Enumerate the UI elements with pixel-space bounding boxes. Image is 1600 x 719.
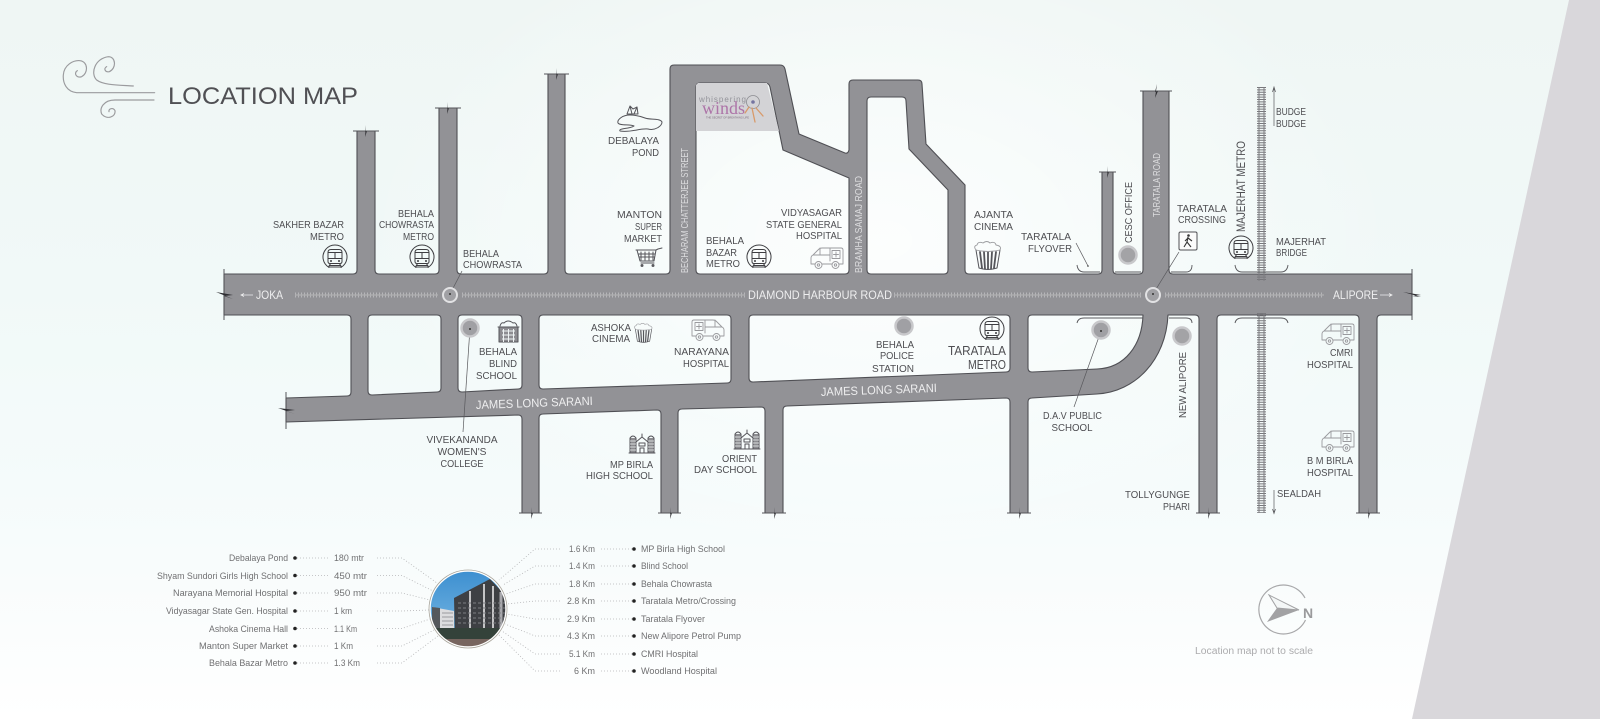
icon: pond [618,106,662,131]
poi: majerhat metro [1229,141,1253,258]
road label: becharam chatterjee street: BECHARAM CHATTERJEE STREET [680,148,691,273]
poi: narayana hospital: NARAYANA [674,347,729,358]
row: shyam sundori school [157,571,367,582]
poi: behala chowrasta: BEHALA [463,249,499,260]
poi: vidyasagar state general hospital [766,208,843,268]
row: cmri hospital: CMRI Hospital [641,649,698,660]
poi: narayana hospital: HOSPITAL [683,359,729,370]
diamond harbour road centre line [295,292,1324,298]
poi: mp birla high school [586,434,655,482]
row: blind school [569,561,688,572]
poi: cesc office [1120,182,1136,264]
row: narayana hospital: 950 mtr [334,588,367,599]
label: debalaya pond: DEBALAYA [608,136,659,147]
label: majerhat bridge: BRIDGE [1276,248,1307,259]
row: taratala metro: 2.8 Km [567,596,595,607]
label: budge budge [1272,87,1306,130]
row: new alipore pump: 4.3 Km [567,631,595,642]
poi: behala police station: BEHALA [876,340,914,351]
road label: taratala road: TARATALA ROAD [1152,153,1163,217]
poi: majerhat metro: MAJERHAT METRO [1234,141,1248,232]
road label: diamond harbour road: DIAMOND HARBOUR ROAD [748,290,892,302]
poi: mp birla high school: MP BIRLA [610,460,653,471]
distance list: left [157,553,367,669]
row: behala bazar metro [209,658,360,669]
label: debalaya pond: POND [632,148,659,159]
icon: wind swirls [63,57,155,117]
poi: b m birla hospital: B M BIRLA [1307,456,1353,467]
poi: vivekananda womens college: COLLEGE [440,459,484,470]
poi: manton super market: MARKET [624,234,662,245]
poi: behala chowrasta metro: BEHALA [398,209,434,220]
road label: joka [241,290,283,302]
poi: debalaya pond [608,106,662,159]
grey corner panel [1412,0,1600,719]
project logo: whispering winds: winds [702,98,745,118]
poi: cmri hospital: CMRI [1330,348,1353,359]
row: taratala metro [567,596,736,607]
label: sealdah [1272,489,1321,514]
row: debalaya pond: 180 mtr [334,553,364,564]
poi: dav public school: D.A.V PUBLIC [1043,411,1102,422]
poi: vivekananda womens college [426,320,498,470]
compass: N [1303,605,1313,621]
poi: vidyasagar state general hospital: VIDYASAGAR [781,208,842,219]
row: cmri hospital: 5.1 Km [569,649,595,660]
row: vidyasagar hospital: 1 km [334,606,352,617]
poi: behala bazar metro: BAZAR [706,248,737,259]
poi: narayana hospital [674,320,729,370]
poi: new alipore: NEW ALIPORE [1177,352,1189,418]
road labels [241,148,1392,412]
row: woodland hospital [574,666,717,677]
poi: orient day school: DAY SCHOOL [694,465,757,476]
poi: cesc office: CESC OFFICE [1123,182,1135,243]
poi: taratala flyover: TARATALA [1021,232,1071,243]
project logo: whispering winds: whispering [698,95,746,104]
poi: behala blind school: BLIND [489,359,517,370]
distance list: right [567,544,741,677]
poi: ajanta cinema: AJANTA [974,210,1013,221]
road label: alipore: ALIPORE [1333,290,1378,302]
connector lines to photo [377,549,560,671]
flyover and bridge brackets [1077,265,1288,323]
title block [63,57,358,117]
poi: tollygunge phari [1125,490,1190,513]
poi: sakher bazar metro [273,220,347,267]
poi: manton super market: MANTON [617,210,662,221]
poi: ajanta cinema: CINEMA [974,222,1013,233]
poi: orient day school [694,430,760,476]
poi: mp birla high school: HIGH SCHOOL [586,471,653,482]
poi: vidyasagar state general hospital: STATE GENERAL [766,220,842,231]
poi: taratala metro: METRO [968,358,1006,372]
row: manton market [199,641,353,652]
poi: new alipore [1174,328,1190,418]
poi: vidyasagar state general hospital: HOSPITAL [796,231,842,242]
row: mp birla: 1.6 Km [569,544,595,555]
poi: behala blind school: SCHOOL [476,371,517,382]
poi: sakher bazar metro: SAKHER BAZAR [273,220,344,231]
row: behala chowrasta: Behala Chowrasta [641,579,713,590]
row: vidyasagar hospital: Vidyasagar State Gen. Hospital [166,606,288,617]
poi: ashoka cinema: ASHOKA [591,323,631,334]
row: cmri hospital [569,649,698,660]
row: new alipore pump [567,631,741,642]
row: woodland hospital: 6 Km [574,666,595,677]
label: sealdah: SEALDAH [1277,489,1321,500]
poi: behala chowrasta metro: CHOWRASTA [379,220,434,231]
row: new alipore pump: New Alipore Petrol Pump [641,631,741,642]
poi: taratala crossing: CROSSING [1178,215,1226,226]
row: behala chowrasta: 1.8 Km [569,579,595,590]
row: debalaya pond [229,553,364,564]
poi: behala blind school [476,321,519,382]
road end break marks [216,68,1421,519]
poi: behala chowrasta metro [379,209,434,267]
row: debalaya pond: Debalaya Pond [229,553,288,564]
poi: behala blind school: BEHALA [479,347,517,358]
poi: manton super market [617,210,662,267]
poi: orient day school: ORIENT [722,454,757,465]
poi: dav public school: SCHOOL [1052,423,1093,434]
row: shyam sundori school: Shyam Sundori Girls High School [157,571,288,582]
poi: behala chowrasta [443,249,522,302]
row: manton market: 1 Km [334,641,353,652]
road label: joka: JOKA [256,290,283,302]
poi: behala chowrasta metro: METRO [403,232,434,243]
row: mp birla: MP Birla High School [641,544,725,555]
poi: taratala crossing [1146,204,1227,302]
poi: taratala flyover: FLYOVER [1028,244,1072,255]
row: narayana hospital: Narayana Memorial Hospital [173,588,288,599]
label: majerhat bridge [1276,237,1326,259]
poi: manton super market: SUPER [635,222,662,233]
note: not to scale: Location map not to scale [1195,646,1313,657]
project logo: whispering winds: THE SECRET OF BREATHING LIFE [706,116,749,120]
poi: ashoka cinema [591,323,652,345]
row: behala bazar metro: 1.3 Km [334,658,360,669]
poi: ajanta cinema [974,210,1013,270]
row: taratala flyover: 2.9 Km [567,614,595,625]
poi: behala police station: STATION [872,364,914,375]
poi: behala police station [872,318,914,375]
label: budge budge: BUDGE [1276,119,1306,130]
poi: behala police station: POLICE [880,351,914,362]
row: woodland hospital: Woodland Hospital [641,666,717,677]
row: blind school: Blind School [641,561,688,572]
compass [1259,585,1313,634]
poi: ashoka cinema: CINEMA [592,334,630,345]
poi: behala chowrasta: CHOWRASTA [463,260,522,271]
row: blind school: 1.4 Km [569,561,595,572]
label: debalaya pond [608,136,659,159]
road network [224,65,1412,513]
poi: b m birla hospital [1307,431,1354,479]
row: shyam sundori school: 450 mtr [334,571,367,582]
row: taratala flyover: Taratala Flyover [641,614,705,625]
poi: tollygunge phari: TOLLYGUNGE [1125,490,1190,501]
row: ashoka cinema [209,624,357,635]
poi: b m birla hospital: HOSPITAL [1307,468,1353,479]
row: behala chowrasta [569,579,713,590]
row: ashoka cinema: Ashoka Cinema Hall [209,624,288,635]
row: behala bazar metro: Behala Bazar Metro [209,658,288,669]
poi: cmri hospital [1307,324,1354,371]
poi: vivekananda womens college: WOMEN'S [438,447,487,458]
row: mp birla [569,544,725,555]
row: ashoka cinema: 1.1 Km [334,624,357,635]
poi: taratala metro [948,317,1007,372]
label: budge budge: BUDGE [1276,107,1306,118]
railway line [1259,87,1264,513]
heading: location map: LOCATION MAP [168,83,358,110]
road label: bramha samaj road: BRAMHA SAMAJ ROAD [854,176,865,273]
road label: james long sarani west: JAMES LONG SARANI [476,394,593,412]
label: majerhat bridge: MAJERHAT [1276,237,1326,248]
road label: james long sarani east: JAMES LONG SARANI [821,381,937,399]
row: manton market: Manton Super Market [199,641,288,652]
row: taratala flyover [567,614,705,625]
poi: taratala flyover [1021,232,1089,267]
poi: behala bazar metro [706,236,771,270]
poi: tollygunge phari: PHARI [1163,502,1190,513]
poi: behala bazar metro: METRO [706,259,740,270]
project logo: whispering winds [696,83,779,131]
poi: behala bazar metro: BEHALA [706,236,744,247]
photo: residential building [429,570,507,648]
poi: taratala crossing: TARATALA [1177,204,1227,215]
row: narayana hospital [173,588,367,599]
poi: taratala metro: TARATALA [948,344,1007,358]
poi: dav public school [1043,322,1110,434]
row: taratala metro: Taratala Metro/Crossing [641,596,736,607]
poi: sakher bazar metro: METRO [310,232,344,243]
poi: cmri hospital: HOSPITAL [1307,360,1353,371]
poi: vivekananda womens college: VIVEKANANDA [426,435,498,446]
icon: shopping cart [636,248,662,267]
